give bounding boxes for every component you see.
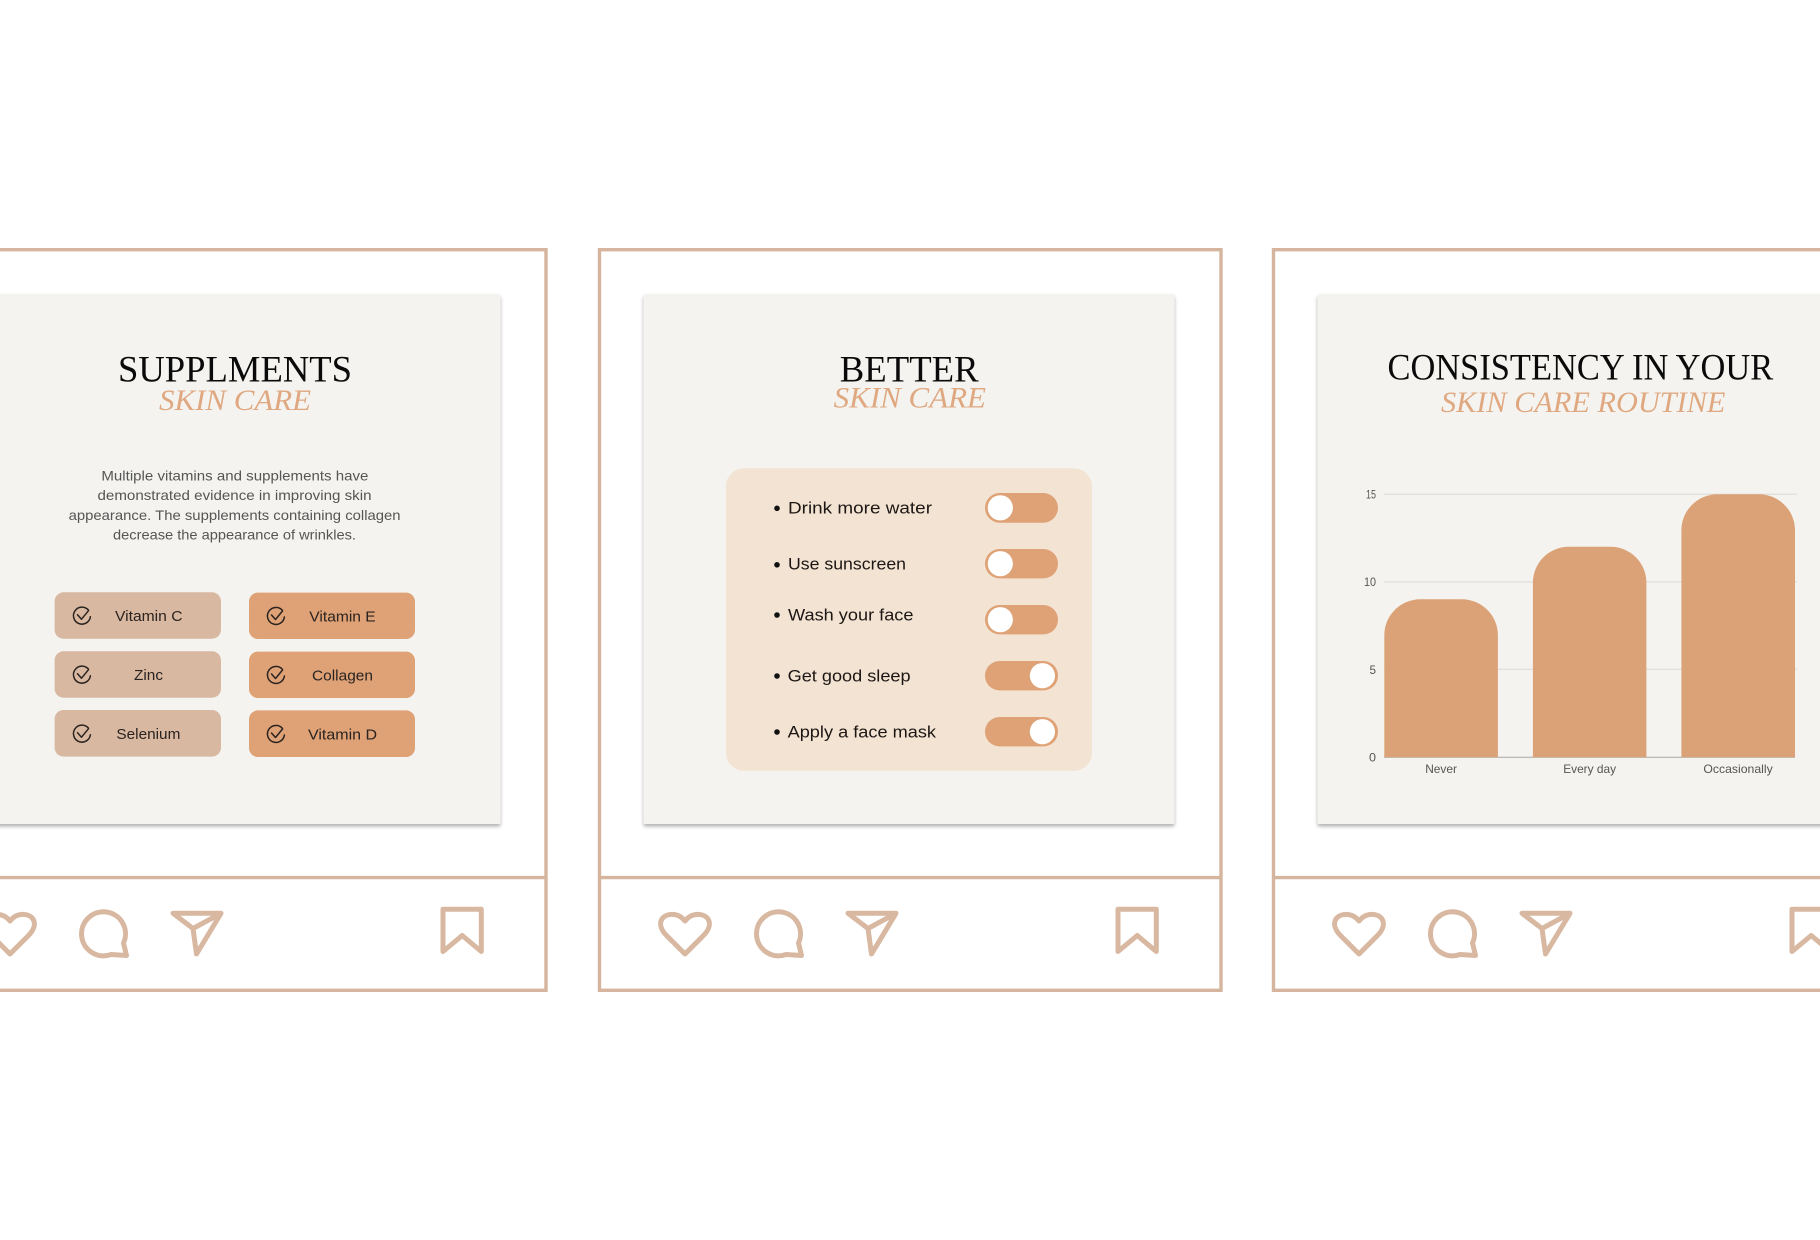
title: BETTER — [840, 350, 979, 390]
subtitle: SKIN CARE ROUTINE — [1441, 387, 1725, 419]
button: Selenium — [55, 710, 221, 757]
item: Apply a face mask: Apply a face mask — [788, 722, 937, 742]
item: Use sunscreen — [774, 549, 1058, 578]
button: Vitamin C — [55, 592, 221, 639]
button: Selenium: Selenium — [116, 727, 180, 743]
slide panel — [0, 294, 500, 824]
post card: supplements — [0, 250, 546, 990]
subtitle: SKIN CARE — [834, 383, 986, 415]
description text — [69, 468, 401, 543]
checklist box — [726, 468, 1092, 771]
item: Get good sleep — [774, 661, 1058, 690]
button: Collagen — [249, 652, 415, 698]
button: Vitamin E — [249, 593, 415, 639]
item: Apply a face mask — [774, 717, 1058, 746]
item: Wash your face — [774, 605, 1058, 634]
action icons — [0, 909, 481, 956]
item: Use sunscreen: Use sunscreen — [788, 554, 906, 574]
button: Collagen: Collagen — [312, 668, 373, 684]
bar chart — [1364, 488, 1797, 776]
bar chart: 10 — [1364, 575, 1376, 589]
bar chart: 15 — [1366, 488, 1376, 502]
description text: demonstrated evidence in improving skin — [98, 487, 372, 503]
action icons — [1335, 909, 1820, 956]
description text: appearance. The supplements containing collagen — [69, 507, 401, 523]
button: Vitamin C: Vitamin C — [115, 609, 182, 625]
button: Vitamin E: Vitamin E — [309, 609, 376, 625]
description text: Multiple vitamins and supplements have — [101, 468, 369, 484]
title: SUPPLMENTS — [118, 350, 352, 390]
subtitle: SKIN CARE — [159, 385, 311, 417]
bar chart: Never — [1425, 762, 1457, 776]
post card: better skin care — [600, 250, 1221, 990]
button: Zinc — [55, 651, 221, 698]
item: Wash your face: Wash your face — [788, 606, 914, 625]
card frame — [0, 250, 546, 990]
bar chart: Every day — [1563, 762, 1616, 776]
bar chart: 5 — [1370, 663, 1376, 677]
card frame — [1274, 250, 1820, 990]
item: Drink more water: Drink more water — [788, 499, 932, 518]
button: Vitamin D: Vitamin D — [308, 727, 377, 743]
button: Zinc: Zinc — [134, 668, 163, 684]
title: CONSISTENCY IN YOUR — [1388, 348, 1773, 388]
description text: decrease the appearance of wrinkles. — [113, 527, 356, 543]
post card: consistency — [1274, 250, 1820, 990]
card frame — [600, 250, 1221, 990]
bar chart: Occasionally — [1703, 762, 1773, 776]
action icons — [661, 909, 1156, 956]
bar chart: 0 — [1369, 750, 1376, 764]
item: Drink more water — [774, 493, 1058, 523]
slide panel — [644, 294, 1174, 824]
button: Vitamin D — [249, 710, 415, 757]
slide panel — [1318, 294, 1820, 824]
item: Get good sleep: Get good sleep — [788, 666, 911, 686]
